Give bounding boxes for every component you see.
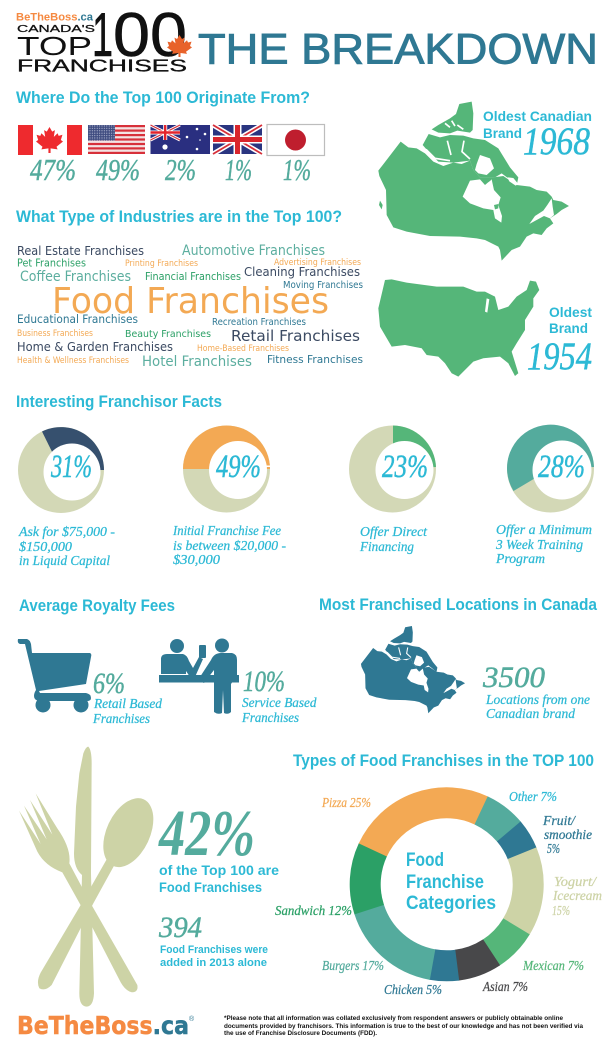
callout: oldest Canadian brand: 1968: [523, 120, 590, 163]
donut chart: food categories: [332, 769, 562, 999]
logo: Canada's Top 100 Franchises: 1: [92, 1, 113, 70]
logo: BeTheBoss.ca footer: BeTheBoss.ca: [17, 1011, 189, 1040]
donut centre label: Franchise: [406, 872, 484, 893]
donut labels: Asian 7%: [482, 980, 528, 995]
fact: 28%: Program: [495, 551, 545, 566]
donut labels: 15%: [552, 904, 570, 919]
donut labels: Icecream: [552, 889, 602, 904]
word cloud: industries: Beauty Franchises: [125, 329, 211, 340]
title: THE BREAKDOWN: [198, 26, 598, 74]
donut labels: Yogurt/: [554, 875, 597, 890]
donut labels: smoothie: [544, 828, 592, 843]
flag: United States: [88, 125, 145, 154]
origin percentages: 1%: [225, 152, 252, 187]
stat: 394 added: added in 2013 alone: [160, 957, 267, 969]
word cloud: industries: Pet Franchises: [17, 258, 86, 270]
word cloud: industries: Hotel Franchises: [142, 354, 252, 370]
donut labels: Burgers 17%: [322, 959, 384, 974]
word cloud: industries: Home-Based Franchises: [197, 344, 290, 354]
fact: 31%: in Liquid Capital: [19, 553, 110, 568]
stat: 394 added: Food Franchises were: [160, 944, 268, 956]
fact: 49%: Initial Franchise Fee: [172, 523, 281, 538]
icon: shopping cart: [18, 639, 91, 712]
callout: oldest brand: [527, 305, 593, 378]
royalty: retail: Retail Based: [93, 696, 162, 711]
logo: BeTheBoss.ca footer: ®: [189, 1015, 195, 1023]
fact: 49%: 49%: [216, 449, 261, 485]
word cloud: industries: Educational Franchises: [17, 312, 138, 326]
donut centre label: Food: [406, 850, 444, 871]
stat: 3500 locations: Canadian brand: [486, 706, 575, 721]
origin percentages: 49%: [96, 152, 140, 187]
stat: 42% food franchises: of the Top 100 are: [159, 862, 279, 878]
callout: oldest Canadian brand: [483, 109, 592, 163]
stat: 42% food franchises: Food Franchises: [159, 879, 262, 895]
word cloud: industries: Coffee Franchises: [20, 269, 131, 285]
icon: service counter people: [159, 638, 239, 714]
callout: oldest Canadian brand: Oldest Canadian: [483, 109, 592, 124]
fact: 28%: Offer a Minimum: [496, 522, 592, 537]
fact: 23%: 23%: [382, 449, 428, 485]
donut labels: Sandwich 12%: [275, 904, 352, 919]
donut labels: Mexican 7%: [522, 959, 584, 974]
royalty: retail: 6%: [93, 667, 125, 700]
donut labels: [275, 790, 602, 998]
fact: 49%: [172, 426, 287, 567]
fact: 31%: Ask for $75,000 -: [18, 524, 116, 539]
stat: 42% food franchises: 42%: [157, 797, 255, 870]
word cloud: industries: Recreation Franchises: [212, 317, 306, 328]
donut labels: Fruit/: [542, 814, 576, 829]
icon: fork knife spoon: [19, 747, 163, 1007]
word cloud: industries: Home & Garden Franchises: [17, 339, 173, 354]
logo: Canada's Top 100 Franchises: BeTheBoss.ca: [16, 12, 94, 24]
royalty: service: Franchises: [241, 710, 299, 725]
fact: 23%: Financing: [359, 539, 414, 554]
logo: Canada's Top 100 Franchises: CANADA'S: [17, 24, 95, 35]
word cloud: industries: Advertising Franchises: [274, 258, 362, 268]
fact: 28%: [495, 425, 594, 566]
word cloud: industries: Moving Franchises: [283, 280, 363, 291]
donut labels: Chicken 5%: [384, 983, 442, 998]
flag: Canada: [18, 125, 82, 155]
royalty: retail: [92, 667, 162, 726]
footnote: [224, 1015, 583, 1037]
royalty: service: Service Based: [242, 695, 317, 710]
stat: 3500 locations: 3500: [482, 661, 545, 694]
word cloud: industries: Health & Wellness Franchises: [17, 356, 130, 366]
footnote: documents provided by franchisors. This information is true to the best of our knowledge and has not been verified via: [224, 1023, 583, 1030]
origin percentages: 2%: [165, 152, 196, 187]
donut labels: Other 7%: [509, 790, 557, 805]
heading: royalty fees: Average Royalty Fees: [19, 596, 175, 615]
callout: oldest Canadian brand: Brand: [483, 126, 522, 141]
footnote: *Please note that all information was collated exclusively from respondent answers or publicly obtainable online: [224, 1015, 563, 1022]
fact: 49%: is between $20,000 -: [173, 538, 287, 553]
fact: 28%: 28%: [538, 449, 585, 485]
word cloud: industries: Retail Franchises: [231, 327, 360, 345]
heading: facts: Interesting Franchisor Facts: [16, 392, 222, 411]
callout: oldest brand: Brand: [549, 321, 588, 336]
logo: Canada's Top 100 Franchises: FRANCHISES: [17, 56, 187, 76]
flags row: [18, 124, 324, 156]
logo: Canada's Top 100 Franchises: 00: [113, 1, 187, 70]
word cloud: industries: Food Franchises: [52, 281, 329, 322]
heading: industries: What Type of Industries are in the Top 100?: [16, 207, 342, 226]
word cloud: industries: Business Franchises: [17, 329, 94, 339]
donut centre label: Categories: [406, 893, 496, 914]
word cloud: industries: Automotive Franchises: [182, 243, 325, 259]
fact: 31%: [18, 427, 116, 568]
word cloud: industries: Real Estate Franchises: [17, 243, 144, 258]
map: Canada: [378, 102, 569, 261]
word cloud: industries: Printing Franchises: [125, 259, 199, 269]
flag: Japan: [267, 124, 324, 156]
footnote: the use of Franchise Disclosure Documents (FDD).: [224, 1030, 377, 1037]
fact: 28%: 3 Week Training: [495, 537, 583, 552]
stat: 394 added: 394: [158, 911, 202, 944]
fact: 31%: $150,000: [19, 539, 72, 554]
flag: United Kingdom: [213, 125, 262, 154]
logo: Canada's Top 100 Franchises: TOP: [17, 31, 92, 61]
fact: 23%: Offer Direct: [360, 524, 428, 539]
fact: 49%: $30,000: [173, 552, 220, 567]
origin percentages: 47%: [30, 152, 76, 187]
logo: Canada's Top 100 Franchises: [16, 1, 192, 76]
word cloud: industries: Fitness Franchises: [267, 353, 363, 366]
origin percentages: 1%: [283, 152, 311, 187]
donut labels: 5%: [547, 842, 560, 857]
flag: Australia: [150, 125, 210, 154]
fact: 31%: 31%: [50, 449, 92, 485]
stat: 3500 locations: [482, 661, 590, 721]
donut centre label: [406, 850, 496, 914]
word cloud: industries: [17, 243, 363, 370]
origin percentages: [30, 152, 311, 187]
stat: 3500 locations: Locations from one: [485, 692, 590, 707]
callout: oldest brand: 1954: [527, 335, 592, 378]
word cloud: industries: Financial Franchises: [145, 271, 241, 283]
royalty: service: [241, 665, 317, 725]
map: United States: [378, 279, 539, 377]
stat: 394 added: [158, 911, 268, 969]
fact: 23%: [349, 426, 436, 554]
heading: origin: Where Do the Top 100 Originate From?: [16, 88, 310, 107]
royalty: retail: Franchises: [92, 711, 150, 726]
callout: oldest brand: Oldest: [549, 305, 593, 320]
donut labels: Pizza 25%: [321, 796, 371, 811]
map: Canada small: [361, 626, 465, 713]
word cloud: industries: Cleaning Franchises: [244, 264, 360, 279]
royalty: service: 10%: [243, 665, 285, 698]
